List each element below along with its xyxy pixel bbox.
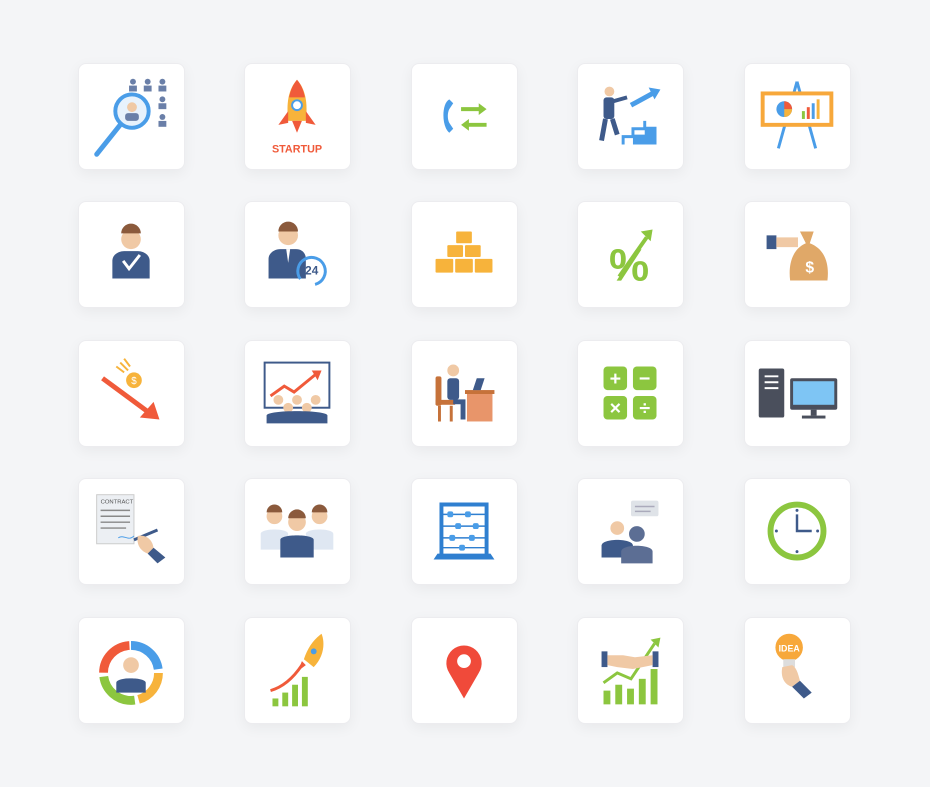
tile: search people: [78, 63, 185, 170]
tile: percent growth: %: [609, 240, 649, 291]
tile: contract: CONTRACT: [101, 500, 134, 506]
tile: clock: [744, 478, 851, 585]
tile: calculator: −: [639, 368, 650, 390]
tile: percent growth: [577, 201, 684, 308]
tile: 24 support: 24: [305, 265, 319, 278]
tile: gold bars: [411, 201, 518, 308]
tile: meeting chart: [244, 340, 351, 447]
tile: abacus: [411, 478, 518, 585]
tile: rocket growth: [244, 617, 351, 724]
tile: handshake growth: [577, 617, 684, 724]
tile: calculator: ÷: [639, 398, 650, 420]
tile: career steps: [577, 63, 684, 170]
tile: idea bulb: IDEA: [779, 643, 800, 653]
tile: money bag hand: [744, 201, 851, 308]
tile: phone transfer: [411, 63, 518, 170]
tile: consultation: [577, 478, 684, 585]
tile: startup rocket: STARTUP: [272, 143, 322, 155]
tile: team: [244, 478, 351, 585]
tile: falling coin: [78, 340, 185, 447]
tile: presentation board: [744, 63, 851, 170]
tile: 24 support: [244, 201, 351, 308]
tile: idea bulb: [744, 617, 851, 724]
tile: computer: [744, 340, 851, 447]
tile: falling coin: $: [131, 376, 137, 387]
tile: calculator: +: [610, 368, 621, 390]
tile: startup rocket: [244, 63, 351, 170]
tile: contract: [78, 478, 185, 585]
tile: approved person: [78, 201, 185, 308]
tile: calculator: [577, 340, 684, 447]
tile: person donut chart: [78, 617, 185, 724]
tile: calculator: ×: [610, 398, 621, 420]
tile: desk worker: [411, 340, 518, 447]
tile: location pin: [411, 617, 518, 724]
tile: money bag hand: $: [805, 260, 814, 277]
